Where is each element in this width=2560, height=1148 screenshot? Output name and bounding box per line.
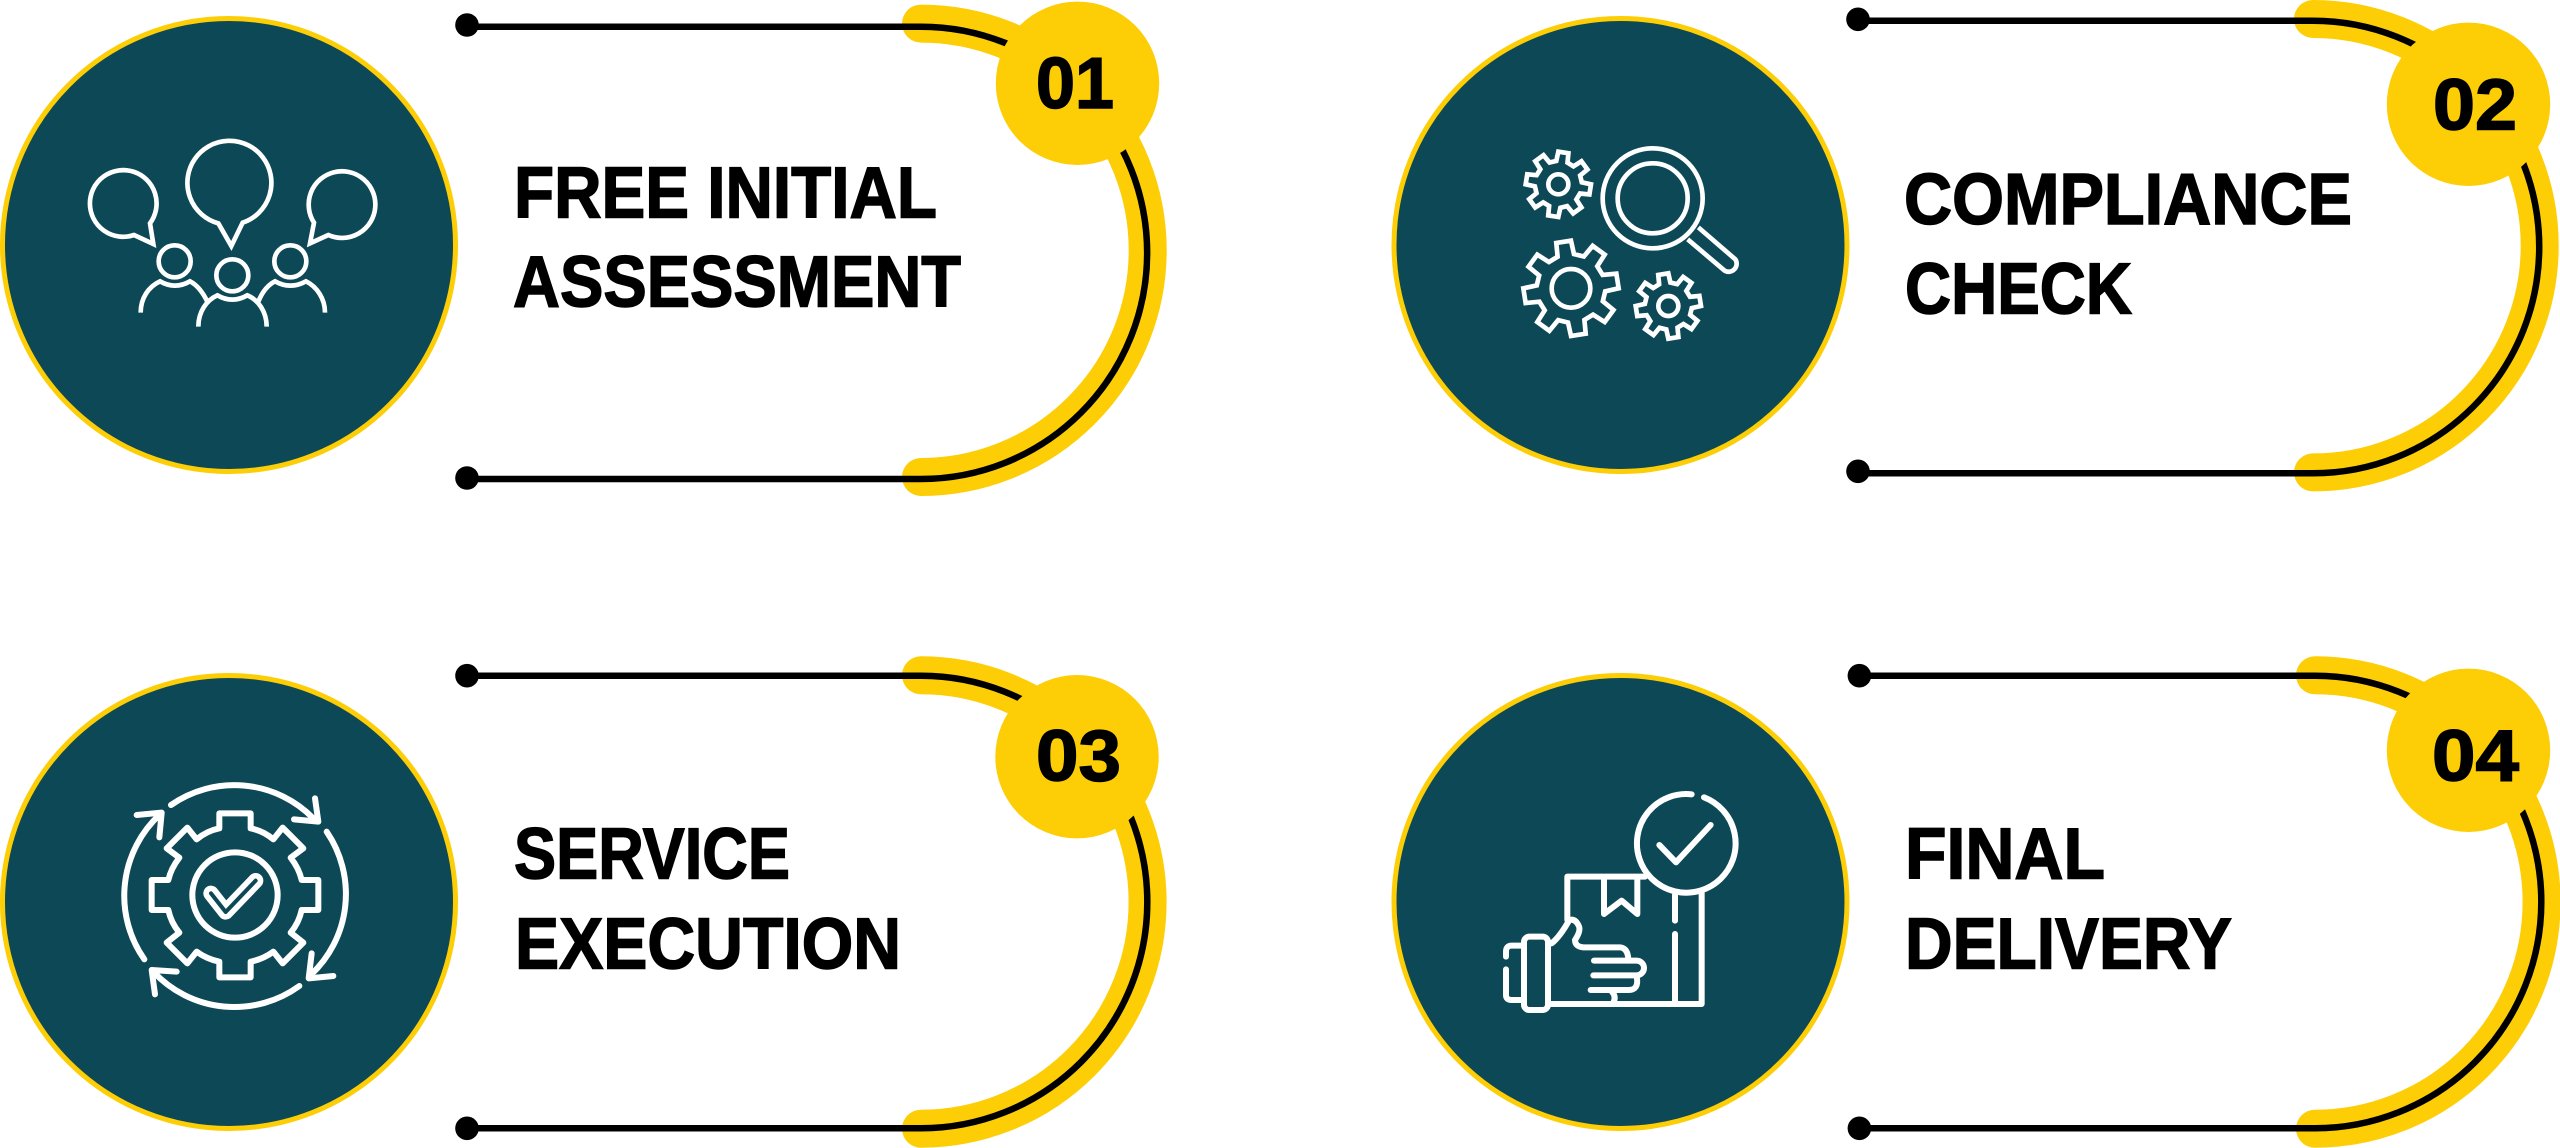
- icon: hand holding box with check: [1506, 794, 1736, 1010]
- yellow arc 02: [2313, 19, 2540, 472]
- connector line 02: [1846, 7, 2539, 483]
- number badge 04: [2387, 669, 2550, 832]
- number badge 02: [2387, 23, 2550, 186]
- teal circle 01: [2, 18, 456, 472]
- heading 01: FREE INITIAL: [514, 152, 937, 233]
- icon: gear with check and cycle arrows: [124, 785, 346, 1007]
- icon: people with speech bubbles: [90, 141, 375, 327]
- heading 04: DELIVERY: [1905, 903, 2232, 984]
- yellow arc 03: [921, 675, 1148, 1129]
- number badge 01: [996, 2, 1159, 165]
- heading 01: ASSESSMENT: [513, 241, 961, 322]
- teal circle 02: [1394, 18, 1847, 472]
- yellow arc 04: [2315, 675, 2542, 1129]
- heading 04: FINAL: [1905, 813, 2105, 894]
- heading 01: [513, 152, 961, 322]
- number badge 03: [995, 675, 1159, 838]
- heading 03: EXECUTION: [515, 903, 901, 984]
- number badge 01: 01: [1036, 43, 1114, 124]
- heading 02: CHECK: [1905, 248, 2132, 329]
- panel: step 04 final delivery: [1394, 664, 2550, 1140]
- panel: step 02 compliance check: [1394, 7, 2550, 483]
- heading 03: [514, 813, 901, 984]
- connector line 01: [455, 13, 1147, 490]
- panel: step 01 free initial assessment: [2, 2, 1159, 490]
- number badge 03: 03: [1036, 715, 1121, 796]
- teal circle 04: [1394, 676, 1847, 1128]
- heading 02: [1904, 159, 2352, 329]
- icon: gears and magnifier: [1517, 147, 1737, 343]
- panel: step 03 service execution: [2, 664, 1159, 1140]
- heading 02: COMPLIANCE: [1904, 159, 2352, 240]
- teal circle 03: [2, 676, 456, 1128]
- yellow arc 01: [921, 24, 1148, 477]
- number badge 02: 02: [2433, 64, 2517, 145]
- number badge 04: 04: [2432, 715, 2519, 796]
- heading 03: SERVICE: [514, 813, 790, 894]
- heading 04: [1905, 813, 2232, 984]
- connector line 03: [455, 664, 1147, 1140]
- connector line 04: [1848, 664, 2541, 1140]
